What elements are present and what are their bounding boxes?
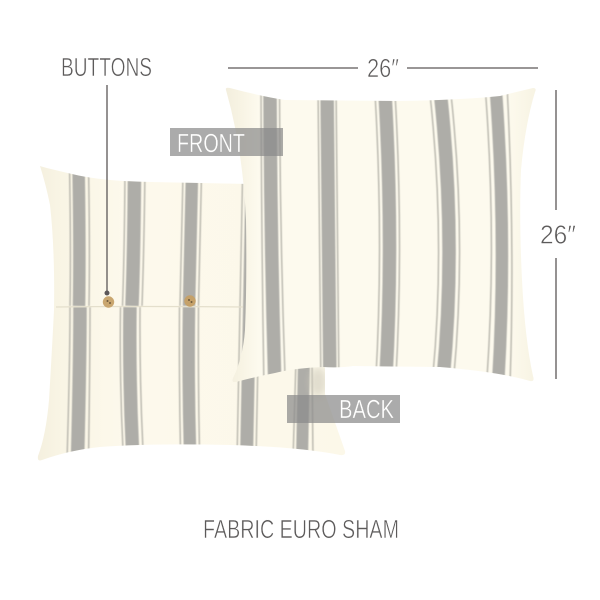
back pillow bbox=[30, 160, 350, 465]
front pillow stripes bbox=[261, 85, 512, 390]
back flap seam bbox=[56, 306, 243, 308]
title: FABRIC EURO SHAM bbox=[203, 516, 399, 544]
front pillow bbox=[220, 85, 540, 390]
back pillow corner shading bbox=[310, 368, 325, 395]
back pillow stripes bbox=[67, 165, 313, 460]
label: FRONT: FRONT bbox=[177, 130, 245, 158]
width dimension: 26″ bbox=[367, 53, 399, 83]
button right bbox=[184, 295, 196, 307]
label: BACK bbox=[287, 395, 400, 424]
label: BACK: BACK bbox=[339, 396, 394, 424]
label: BUTTONS: BUTTONS bbox=[61, 54, 152, 82]
buttons pointer bbox=[104, 85, 110, 296]
button left bbox=[103, 296, 114, 308]
height dimension: 26″ bbox=[540, 220, 576, 250]
